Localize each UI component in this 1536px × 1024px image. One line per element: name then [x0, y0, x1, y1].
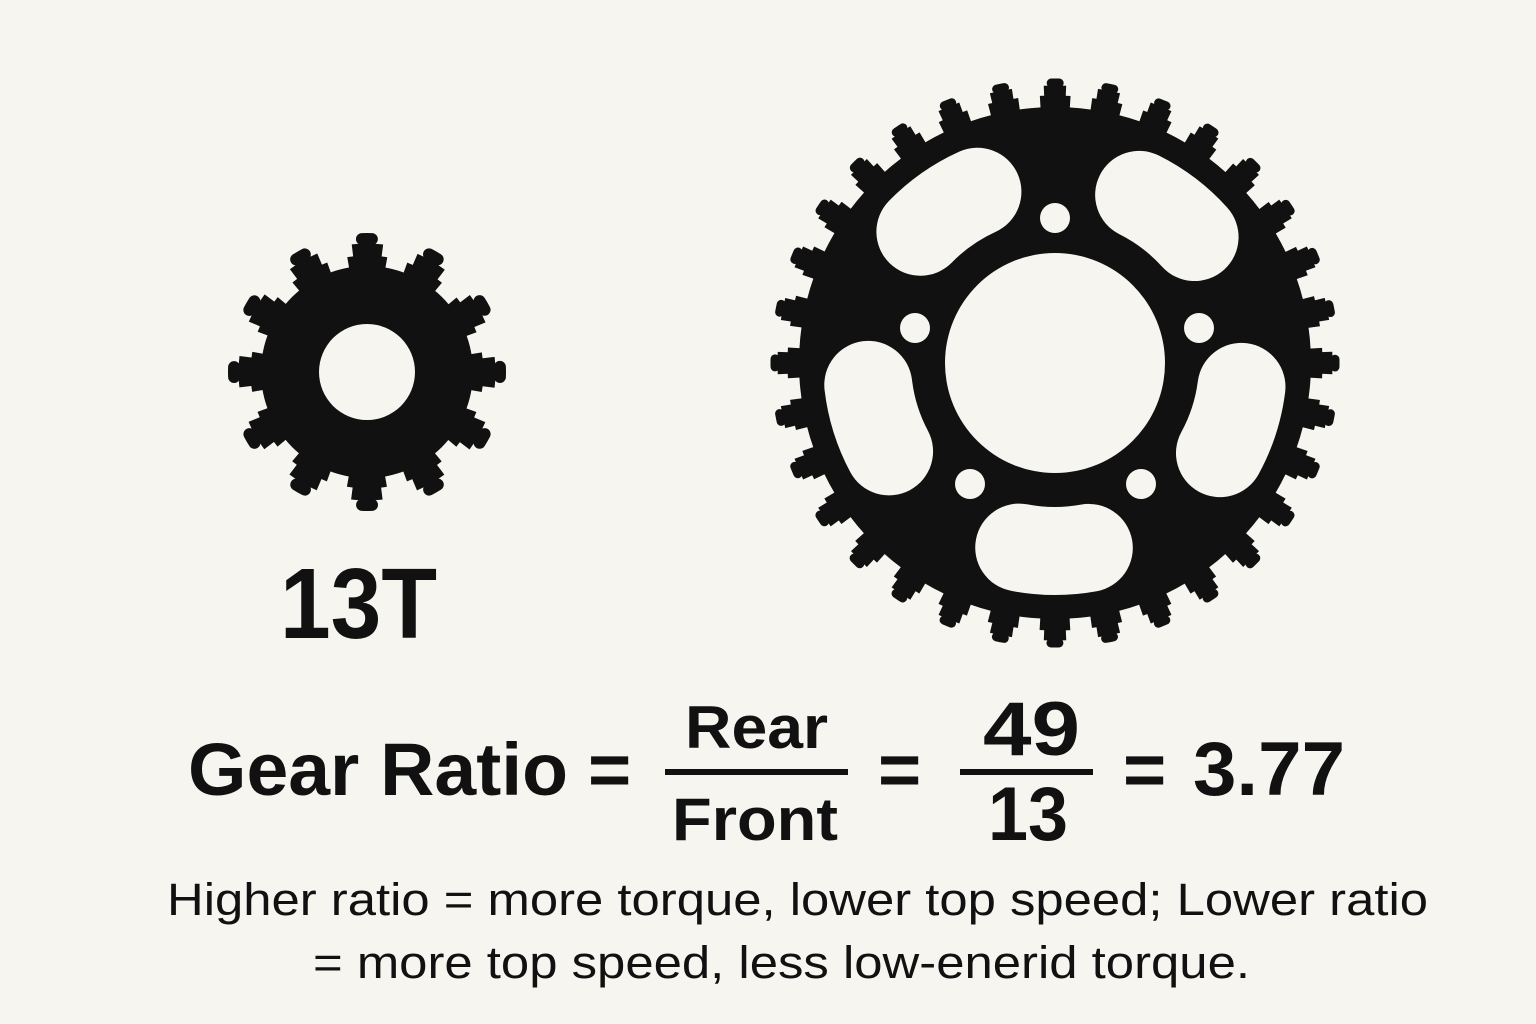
formula: gear ratio equation: =	[1123, 728, 1166, 811]
text: explanation: Higher ratio = more torque, lower top speed; Lower ratio	[167, 874, 1428, 925]
formula: gear ratio equation: 49	[983, 687, 1080, 772]
text: explanation: = more top speed, less low-enerid torque.	[313, 937, 1250, 988]
formula: gear ratio equation	[188, 687, 1345, 857]
formula: gear ratio equation: Rear	[685, 694, 828, 761]
label: 13T: 13T	[280, 548, 437, 660]
formula: gear ratio equation: 13	[988, 772, 1068, 857]
formula: gear ratio equation: =	[588, 728, 631, 811]
text: explanation	[167, 874, 1428, 988]
icon: large rear sprocket	[775, 83, 1335, 643]
formula: gear ratio equation: Gear Ratio	[188, 728, 568, 811]
formula: gear ratio equation: =	[878, 728, 921, 811]
formula: gear ratio equation: 3.77	[1193, 727, 1345, 812]
formula: gear ratio equation: Front	[672, 786, 838, 853]
icon: small front sprocket	[234, 239, 500, 505]
